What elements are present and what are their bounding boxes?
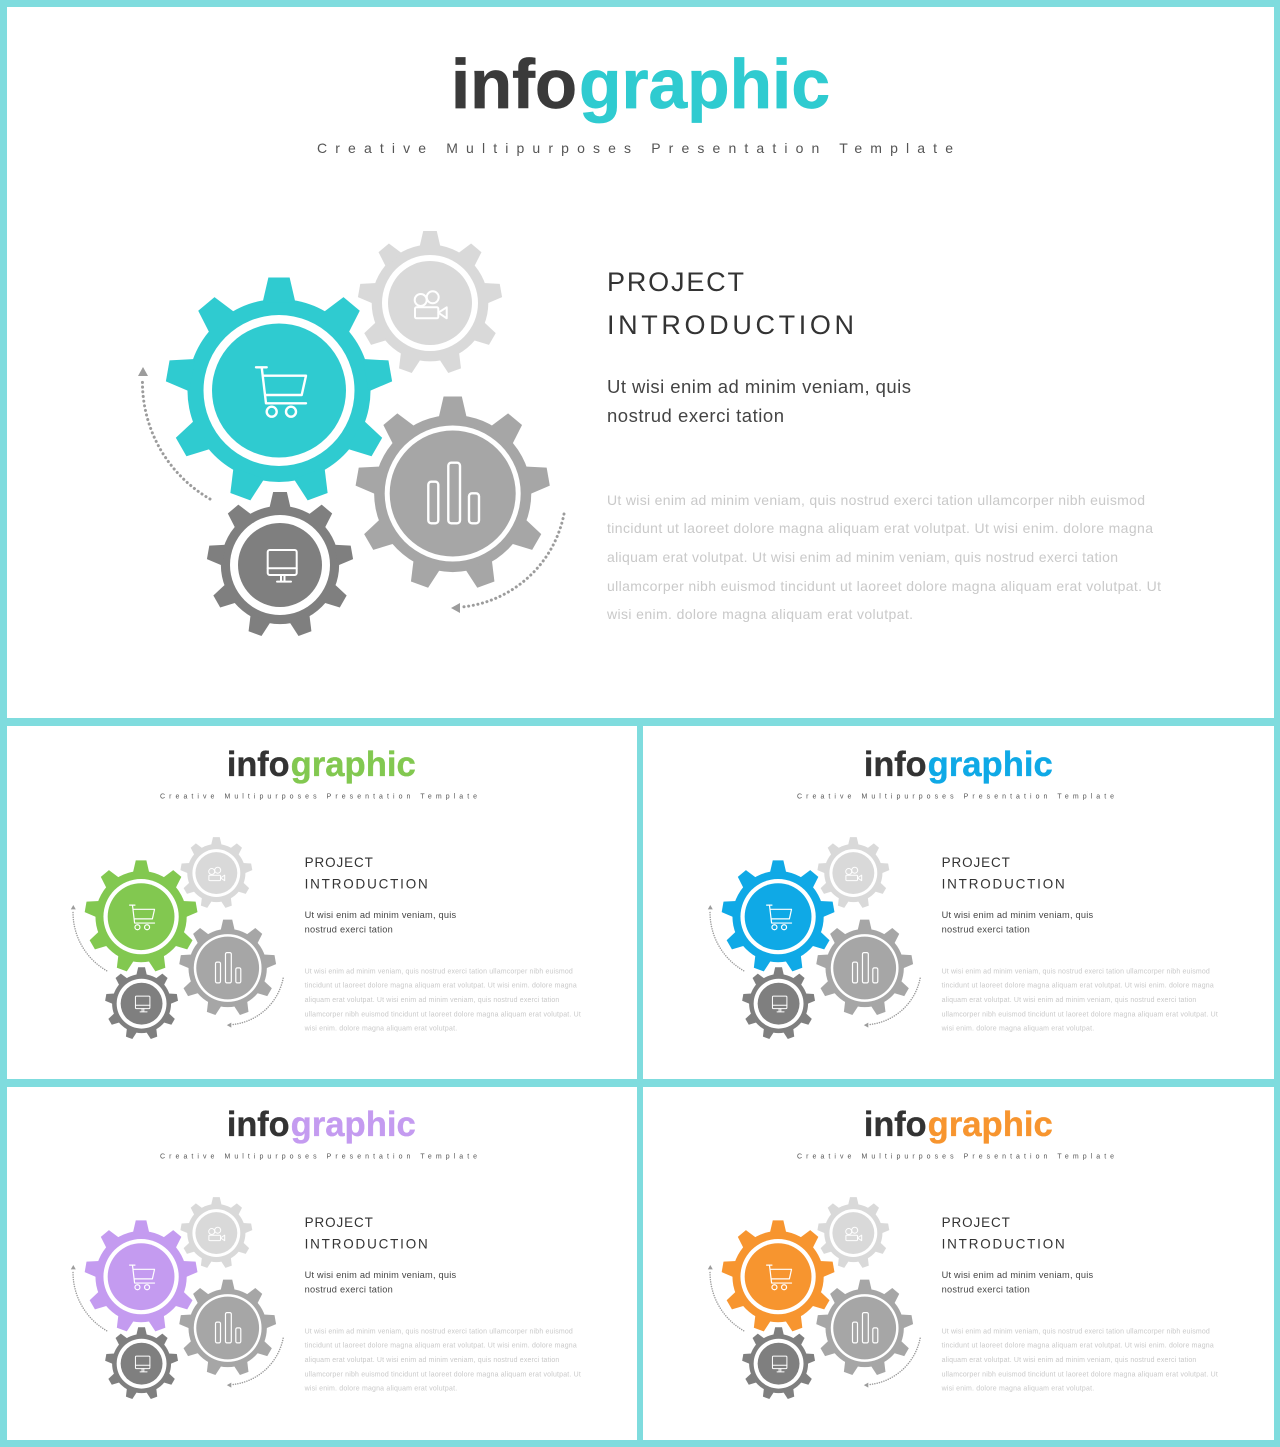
title: graphic <box>579 45 830 123</box>
subheading blue <box>942 910 1094 934</box>
heading <box>607 267 854 340</box>
heading purple: INTRODUCTION <box>305 1236 428 1251</box>
body blue: ullamcorper nibh euismod tincidunt ut laoreet dolore magna aliquam erat volutpat. Ut <box>942 1012 1218 1019</box>
subheading orange <box>942 1270 1094 1294</box>
heading green <box>305 855 428 891</box>
panel: green slide <box>7 726 637 1079</box>
body text <box>606 492 1161 622</box>
title green: graphic <box>291 745 416 784</box>
heading orange <box>942 1215 1065 1251</box>
purple slide contents <box>71 1105 581 1400</box>
orange slide contents <box>708 1105 1218 1400</box>
body blue: Ut wisi enim ad minim veniam, quis nostrud exerci tation ullamcorper nibh euismod <box>942 969 1210 976</box>
subheading orange: Ut wisi enim ad minim veniam, quis <box>942 1270 1094 1280</box>
body text: aliquam erat volutpat. Ut wisi enim ad minim veniam, quis nostrud exerci tation <box>607 549 1118 565</box>
gear cluster <box>138 231 564 637</box>
gear: camera <box>357 231 503 374</box>
title blue: info <box>864 745 927 784</box>
subheading purple: nostrud exerci tation <box>305 1284 393 1294</box>
title orange: info <box>864 1105 927 1144</box>
gears purple <box>71 1197 283 1400</box>
body purple: aliquam erat volutpat. Ut wisi enim ad minim veniam, quis nostrud exerci tation <box>305 1357 559 1364</box>
title orange <box>864 1105 1053 1144</box>
subheading purple <box>305 1270 457 1294</box>
gear: chart <box>355 396 551 589</box>
body purple <box>304 1329 581 1393</box>
body orange: ullamcorper nibh euismod tincidunt ut laoreet dolore magna aliquam erat volutpat. Ut <box>942 1372 1218 1379</box>
subheading: nostrud exerci tation <box>607 405 784 426</box>
subheading: Ut wisi enim ad minim veniam, quis <box>607 376 911 397</box>
gears blue <box>708 837 920 1040</box>
tagline blue: Creative Multipurposes Presentation Template <box>797 793 1114 800</box>
body green <box>304 969 581 1033</box>
body purple: wisi enim. dolore magna aliquam erat volutpat. <box>304 1386 457 1393</box>
subheading <box>607 376 911 426</box>
body purple: ullamcorper nibh euismod tincidunt ut laoreet dolore magna aliquam erat volutpat. Ut <box>305 1372 581 1379</box>
title purple: info <box>227 1105 290 1144</box>
heading green: PROJECT <box>305 855 373 870</box>
gear: cart <box>165 278 393 502</box>
heading blue <box>942 855 1065 891</box>
subheading green <box>305 910 457 934</box>
arrow: left dotted <box>138 367 210 499</box>
arrow: right dotted <box>451 514 564 613</box>
body blue <box>941 969 1218 1033</box>
title blue <box>864 745 1053 784</box>
heading: PROJECT <box>607 267 744 297</box>
panel: main slide <box>7 7 1274 718</box>
subheading blue: Ut wisi enim ad minim veniam, quis <box>942 910 1094 920</box>
body text: tincidunt ut laoreet dolore magna aliquam erat volutpat. Ut wisi enim. dolore magna <box>607 520 1153 536</box>
gear: monitor <box>206 492 354 637</box>
title orange: graphic <box>928 1105 1053 1144</box>
subheading green: Ut wisi enim ad minim veniam, quis <box>305 910 457 920</box>
subheading purple: Ut wisi enim ad minim veniam, quis <box>305 1270 457 1280</box>
body green: ullamcorper nibh euismod tincidunt ut laoreet dolore magna aliquam erat volutpat. Ut <box>305 1012 581 1019</box>
green slide contents <box>71 745 581 1040</box>
body text: ullamcorper nibh euismod tincidunt ut laoreet dolore magna aliquam erat volutpat. Ut <box>607 578 1161 594</box>
body green: Ut wisi enim ad minim veniam, quis nostrud exerci tation ullamcorper nibh euismod <box>305 969 573 976</box>
panel: blue slide <box>643 726 1274 1079</box>
heading blue: PROJECT <box>942 855 1010 870</box>
title green <box>227 745 416 784</box>
heading: INTRODUCTION <box>607 310 854 340</box>
heading green: INTRODUCTION <box>305 876 428 891</box>
heading orange: PROJECT <box>942 1215 1010 1230</box>
blue slide contents <box>708 745 1218 1040</box>
body purple: Ut wisi enim ad minim veniam, quis nostrud exerci tation ullamcorper nibh euismod <box>305 1329 573 1336</box>
tagline orange: Creative Multipurposes Presentation Template <box>797 1153 1114 1160</box>
body blue: aliquam erat volutpat. Ut wisi enim ad minim veniam, quis nostrud exerci tation <box>942 997 1196 1004</box>
subheading green: nostrud exerci tation <box>305 924 393 934</box>
body green: wisi enim. dolore magna aliquam erat volutpat. <box>304 1026 457 1033</box>
tagline purple: Creative Multipurposes Presentation Template <box>160 1153 477 1160</box>
heading purple: PROJECT <box>305 1215 373 1230</box>
body orange: Ut wisi enim ad minim veniam, quis nostrud exerci tation ullamcorper nibh euismod <box>942 1329 1210 1336</box>
body text: Ut wisi enim ad minim veniam, quis nostrud exerci tation ullamcorper nibh euismod <box>607 492 1145 508</box>
panel: orange slide <box>643 1087 1274 1440</box>
subheading blue: nostrud exerci tation <box>942 924 1030 934</box>
title green: info <box>227 745 290 784</box>
title: info <box>451 45 577 123</box>
heading purple <box>305 1215 428 1251</box>
title purple <box>227 1105 416 1144</box>
body green: tincidunt ut laoreet dolore magna aliquam erat volutpat. Ut wisi enim. dolore magna <box>305 983 577 990</box>
body orange <box>941 1329 1218 1393</box>
body orange: wisi enim. dolore magna aliquam erat volutpat. <box>941 1386 1094 1393</box>
title purple: graphic <box>291 1105 416 1144</box>
body blue: tincidunt ut laoreet dolore magna aliquam erat volutpat. Ut wisi enim. dolore magna <box>942 983 1214 990</box>
body purple: tincidunt ut laoreet dolore magna aliquam erat volutpat. Ut wisi enim. dolore magna <box>305 1343 577 1350</box>
heading orange: INTRODUCTION <box>942 1236 1065 1251</box>
heading blue: INTRODUCTION <box>942 876 1065 891</box>
gears orange <box>708 1197 920 1400</box>
body blue: wisi enim. dolore magna aliquam erat volutpat. <box>941 1026 1094 1033</box>
title <box>451 45 830 123</box>
panel: purple slide <box>7 1087 637 1440</box>
body orange: aliquam erat volutpat. Ut wisi enim ad minim veniam, quis nostrud exerci tation <box>942 1357 1196 1364</box>
body green: aliquam erat volutpat. Ut wisi enim ad minim veniam, quis nostrud exerci tation <box>305 997 559 1004</box>
body text: wisi enim. dolore magna aliquam erat volutpat. <box>606 606 913 622</box>
tagline green: Creative Multipurposes Presentation Template <box>160 793 477 800</box>
body orange: tincidunt ut laoreet dolore magna aliquam erat volutpat. Ut wisi enim. dolore magna <box>942 1343 1214 1350</box>
subheading orange: nostrud exerci tation <box>942 1284 1030 1294</box>
tagline: Creative Multipurposes Presentation Template <box>317 140 953 156</box>
title blue: graphic <box>928 745 1053 784</box>
gears green <box>71 837 283 1040</box>
